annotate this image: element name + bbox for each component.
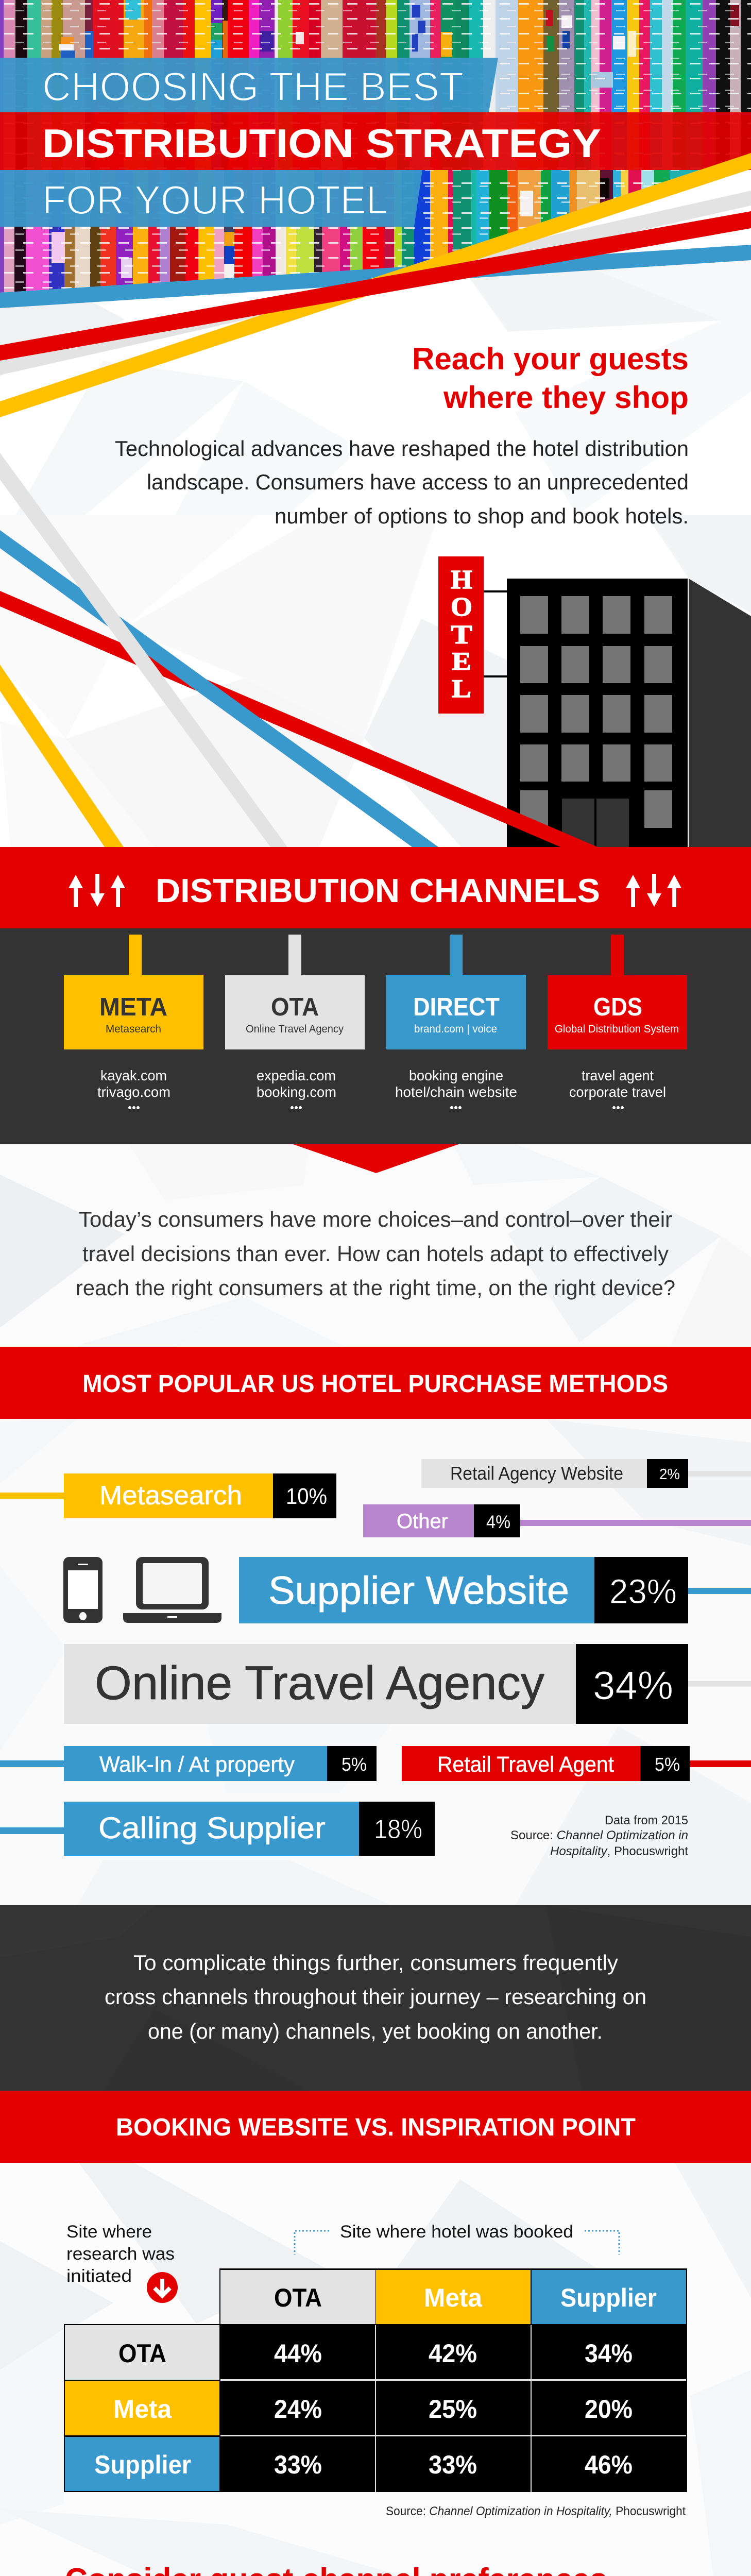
card: META [64,935,203,1109]
bar: online travel agency 34%: 34% [593,1663,673,1708]
building windows [520,596,672,828]
text: today's consumers: Today’s consumers have more choices–and control–over their [79,1207,672,1231]
table frame [219,2268,687,2325]
card: DIRECT: hotel/chain website [395,1084,517,1100]
bar: calling supplier 18%: Calling Supplier [98,1811,326,1845]
bar: calling supplier 18% [0,1802,435,1856]
bar: retail agency website 2%: 2% [659,1466,680,1483]
text: today's consumers: travel decisions than ever. How can hotels adapt to effectively [82,1242,669,1266]
building doors [562,799,629,847]
card: OTA: expedia.com [257,1067,336,1083]
sign letters: H [451,565,472,595]
sign letters: E [452,647,471,675]
sign letters: T [451,620,472,650]
icon: laptop [123,1557,221,1623]
diagonal ribbons under the photo [0,153,751,417]
sign letters: L [452,674,471,703]
bar: metasearch 10% [0,1473,336,1518]
label: site where research was initiated [66,2222,178,2303]
table values: 46% [585,2450,633,2479]
banner: booking website vs inspiration point [0,2091,751,2163]
banner: most popular purchase methods [0,1347,751,1419]
bar: other 4%: Other [397,1510,448,1533]
card: OTA [225,935,365,1109]
label: site where research was initiated: research was [66,2244,175,2264]
chart source note: Source: Channel Optimization in [510,1828,688,1842]
column headers: Supplier [560,2283,657,2312]
icon: red down arrow [147,2272,178,2303]
table source note: Source: Channel Optimization in Hospitality, Phocuswright [386,2504,686,2518]
table values [274,2339,633,2479]
arrows right [626,874,681,907]
card: GDS: GDS [593,993,642,1021]
text: today's consumers: reach the right consumers at the right time, on the right device? [76,1276,675,1300]
diagonal ribbons converging on hotel [0,453,598,847]
title line 3: FOR YOUR HOTEL [42,177,388,223]
blue title band bottom [0,170,422,227]
card: GDS: travel agent [582,1067,654,1083]
bar: retail agency website 2%: Retail Agency Website [450,1463,623,1484]
hotel sign [438,556,484,714]
bar: metasearch 10%: Metasearch [99,1481,242,1511]
bar: walk-in 5% [0,1746,377,1781]
bar: other 4%: 4% [486,1512,510,1532]
title banner [0,58,751,227]
building shadow [689,579,751,847]
row headers: Meta [113,2395,172,2424]
table values: 24% [274,2395,322,2424]
chart source note: Data from 2015 [605,1814,688,1827]
intro text [115,436,689,528]
intro text: landscape. Consumers have access to an unprecedented [147,470,689,494]
intro text: number of options to shop and book hotels. [275,504,689,528]
card: OTA: OTA [271,993,319,1021]
blue title band top [0,58,498,112]
text: today's consumers [76,1207,675,1300]
header cells [220,2270,376,2324]
heading: reach your guests [412,342,689,415]
banner: distribution channels [0,847,751,928]
row headers: OTA [118,2339,166,2368]
label: site where research was initiated: Site where [66,2222,152,2242]
sign brackets [484,590,507,677]
sign letters: O [451,592,472,622]
card: GDS [548,935,687,1109]
red pointer triangle [293,1144,458,1173]
arrows left [69,874,125,907]
card: DIRECT: brand.com | voice [414,1023,497,1035]
heading: reach your guests: where they shop [443,380,689,415]
bar: supplier website 23%: 23% [609,1572,677,1611]
card: DIRECT: DIRECT [413,993,500,1021]
chart source note: Hospitality, Phocuswright [550,1844,688,1858]
banner: most popular purchase methods: MOST POPULAR US HOTEL PURCHASE METHODS [82,1370,668,1398]
bar: retail agency website 2% [421,1459,751,1488]
panel: cross channel text [0,1905,751,2091]
bar: retail travel agent 5% [402,1746,751,1781]
chart source note [510,1814,688,1858]
table values: 33% [429,2450,477,2479]
bar: online travel agency 34% [64,1644,751,1724]
table values: 25% [429,2395,477,2424]
card: OTA: booking.com [257,1084,336,1100]
table values: 44% [274,2339,322,2368]
bar: retail travel agent 5%: 5% [655,1754,680,1775]
icon: smartphone [63,1557,103,1623]
intro text: Technological advances have reshaped the hotel distribution [115,436,689,461]
bar: supplier website 23%: Supplier Website [268,1569,569,1613]
card: META: kayak.com [100,1067,167,1083]
card: DIRECT [386,935,526,1109]
column headers: OTA [274,2283,322,2312]
table values: 20% [585,2395,633,2424]
title line 1: CHOOSING THE BEST [42,64,464,109]
bar: online travel agency 34%: Online Travel Agency [95,1657,544,1709]
title line 2: DISTRIBUTION STRATEGY [42,121,601,166]
card: META: trivago.com [97,1084,170,1100]
row headers [94,2339,191,2479]
photo: colourful woven fabric background [0,0,751,309]
panel: cross channel text: one (or many) channels, yet booking on another. [148,2019,603,2043]
bar: metasearch 10%: 10% [286,1484,327,1509]
bar: walk-in 5%: 5% [342,1754,367,1775]
table values: 34% [585,2339,633,2368]
red title band [0,112,751,170]
column headers [274,2283,657,2312]
panel: cross channel text: cross channels throughout their journey – researching on [105,1985,646,2009]
chart: purchase methods bars [0,1459,751,1858]
bar: retail travel agent 5%: Retail Travel Agent [437,1752,614,1777]
bar: walk-in 5%: Walk-In / At property [99,1752,295,1777]
card: GDS: Global Distribution System [555,1023,679,1035]
panel: cross channel text: To complicate things further, consumers frequently [133,1951,618,1975]
panel: channel cards [0,928,751,1144]
icon: hotel building with sign [438,556,751,847]
card: META: Metasearch [106,1023,161,1035]
table values: 42% [429,2339,477,2368]
bar: other 4% [363,1504,751,1537]
table values: 33% [274,2450,322,2479]
sign letters [451,565,472,703]
label: site where hotel was booked [295,2222,619,2255]
banner: booking website vs inspiration point: BOOKING WEBSITE VS. INSPIRATION POINT [116,2114,636,2141]
bar: calling supplier 18%: 18% [374,1815,422,1844]
building body [507,579,688,847]
row headers: Supplier [94,2450,191,2479]
card: META: META [99,993,167,1021]
row header cells [65,2325,219,2380]
column headers: Meta [424,2283,483,2312]
card: OTA: Online Travel Agency [246,1023,344,1035]
heading text: DISTRIBUTION CHANNELS [156,872,600,909]
label: site where research was initiated: initiated [66,2266,132,2286]
label: site where hotel was booked: Site where hotel was booked [340,2222,573,2242]
card: GDS: corporate travel [569,1084,666,1100]
cell separators [220,2325,686,2492]
heading: reach your guests: Reach your guests [412,342,689,376]
bar: supplier website 23% [239,1557,751,1623]
table: booking vs research [64,2268,687,2492]
card: DIRECT: booking engine [409,1067,503,1083]
